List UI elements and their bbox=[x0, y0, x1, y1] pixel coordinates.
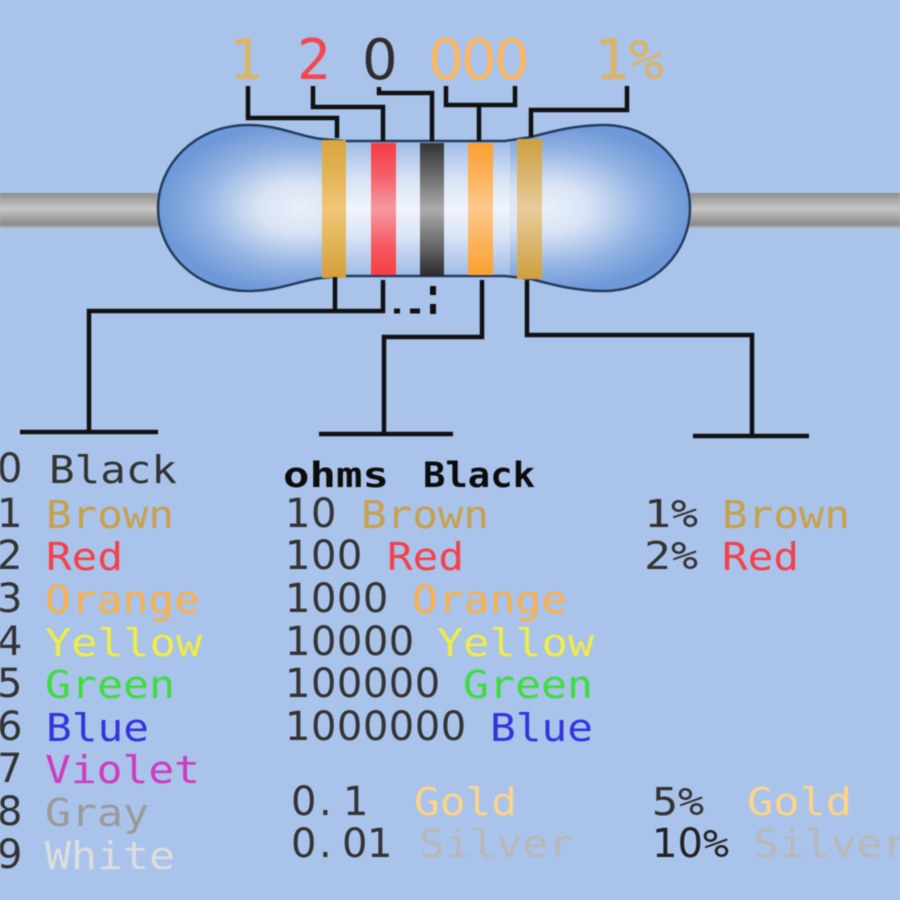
multiplier column: 1000 bbox=[285, 576, 389, 622]
tolerance column: 1% bbox=[644, 492, 698, 536]
digit colour code column: Black bbox=[49, 448, 177, 492]
digit colour code column: Yellow bbox=[45, 621, 202, 665]
digit colour code column: Red bbox=[46, 535, 123, 579]
multiplier column: 10000 bbox=[285, 619, 415, 665]
resistor with colour bands bbox=[150, 120, 700, 300]
multiplier column: Green bbox=[463, 663, 593, 707]
tolerance column bbox=[644, 492, 900, 867]
right lead wire bbox=[686, 193, 900, 228]
multiplier column: Black bbox=[423, 456, 535, 496]
tolerance column: Silver bbox=[753, 822, 900, 866]
tolerance column: % bbox=[703, 822, 729, 866]
band 1 tan bbox=[322, 140, 346, 278]
multiplier column: Yellow bbox=[437, 621, 594, 665]
band 5 tan bbox=[517, 139, 542, 279]
multiplier column: Orange bbox=[412, 578, 567, 622]
tolerance column: 10 bbox=[652, 821, 703, 867]
digit colour code column: White bbox=[45, 834, 175, 878]
tolerance column: Red bbox=[722, 535, 799, 579]
multiplier column: 0.01 bbox=[291, 821, 392, 867]
top value labels bbox=[229, 28, 664, 93]
multiplier column: 0.1 bbox=[291, 779, 368, 825]
top value labels: 1 bbox=[229, 28, 263, 93]
resistor body bbox=[158, 126, 690, 290]
digit colour code column: Green bbox=[45, 663, 175, 707]
multiplier column: 1000000 bbox=[285, 704, 467, 750]
resistor outline bbox=[158, 125, 690, 291]
bottom connector lines bbox=[20, 277, 809, 436]
tolerance column: 5% bbox=[652, 780, 704, 824]
multiplier column: 10 bbox=[285, 491, 337, 537]
digit colour code column: Gray bbox=[45, 791, 149, 835]
top value labels: 000 bbox=[428, 28, 530, 93]
digit colour code column: Violet bbox=[45, 748, 200, 792]
multiplier column: ohms bbox=[283, 456, 389, 496]
multiplier column: Gold bbox=[414, 780, 517, 824]
band 2 red bbox=[371, 143, 396, 275]
digit colour code column: Blue bbox=[46, 706, 149, 750]
multiplier column: Red bbox=[387, 535, 464, 579]
top value labels: 1% bbox=[594, 28, 664, 93]
band 3 black bbox=[420, 143, 444, 276]
digit colour code column: Brown bbox=[46, 493, 174, 537]
left lead wire bbox=[0, 193, 162, 228]
digit colour code column: Orange bbox=[45, 578, 200, 622]
multiplier column bbox=[283, 456, 594, 867]
top connector lines bbox=[248, 86, 627, 141]
digit colour code column bbox=[0, 446, 202, 878]
multiplier column: Brown bbox=[361, 493, 489, 537]
tolerance column: Gold bbox=[747, 780, 852, 824]
top value labels: 2 bbox=[297, 28, 331, 93]
multiplier column: 100000 bbox=[285, 661, 441, 707]
multiplier column: Blue bbox=[490, 706, 593, 750]
band 4 orange bbox=[468, 143, 493, 275]
top value labels: 0 bbox=[362, 28, 398, 93]
tolerance column: Brown bbox=[722, 493, 850, 537]
multiplier column: Silver bbox=[419, 822, 574, 866]
tolerance column: 2% bbox=[644, 534, 698, 578]
multiplier column: 100 bbox=[285, 533, 363, 579]
